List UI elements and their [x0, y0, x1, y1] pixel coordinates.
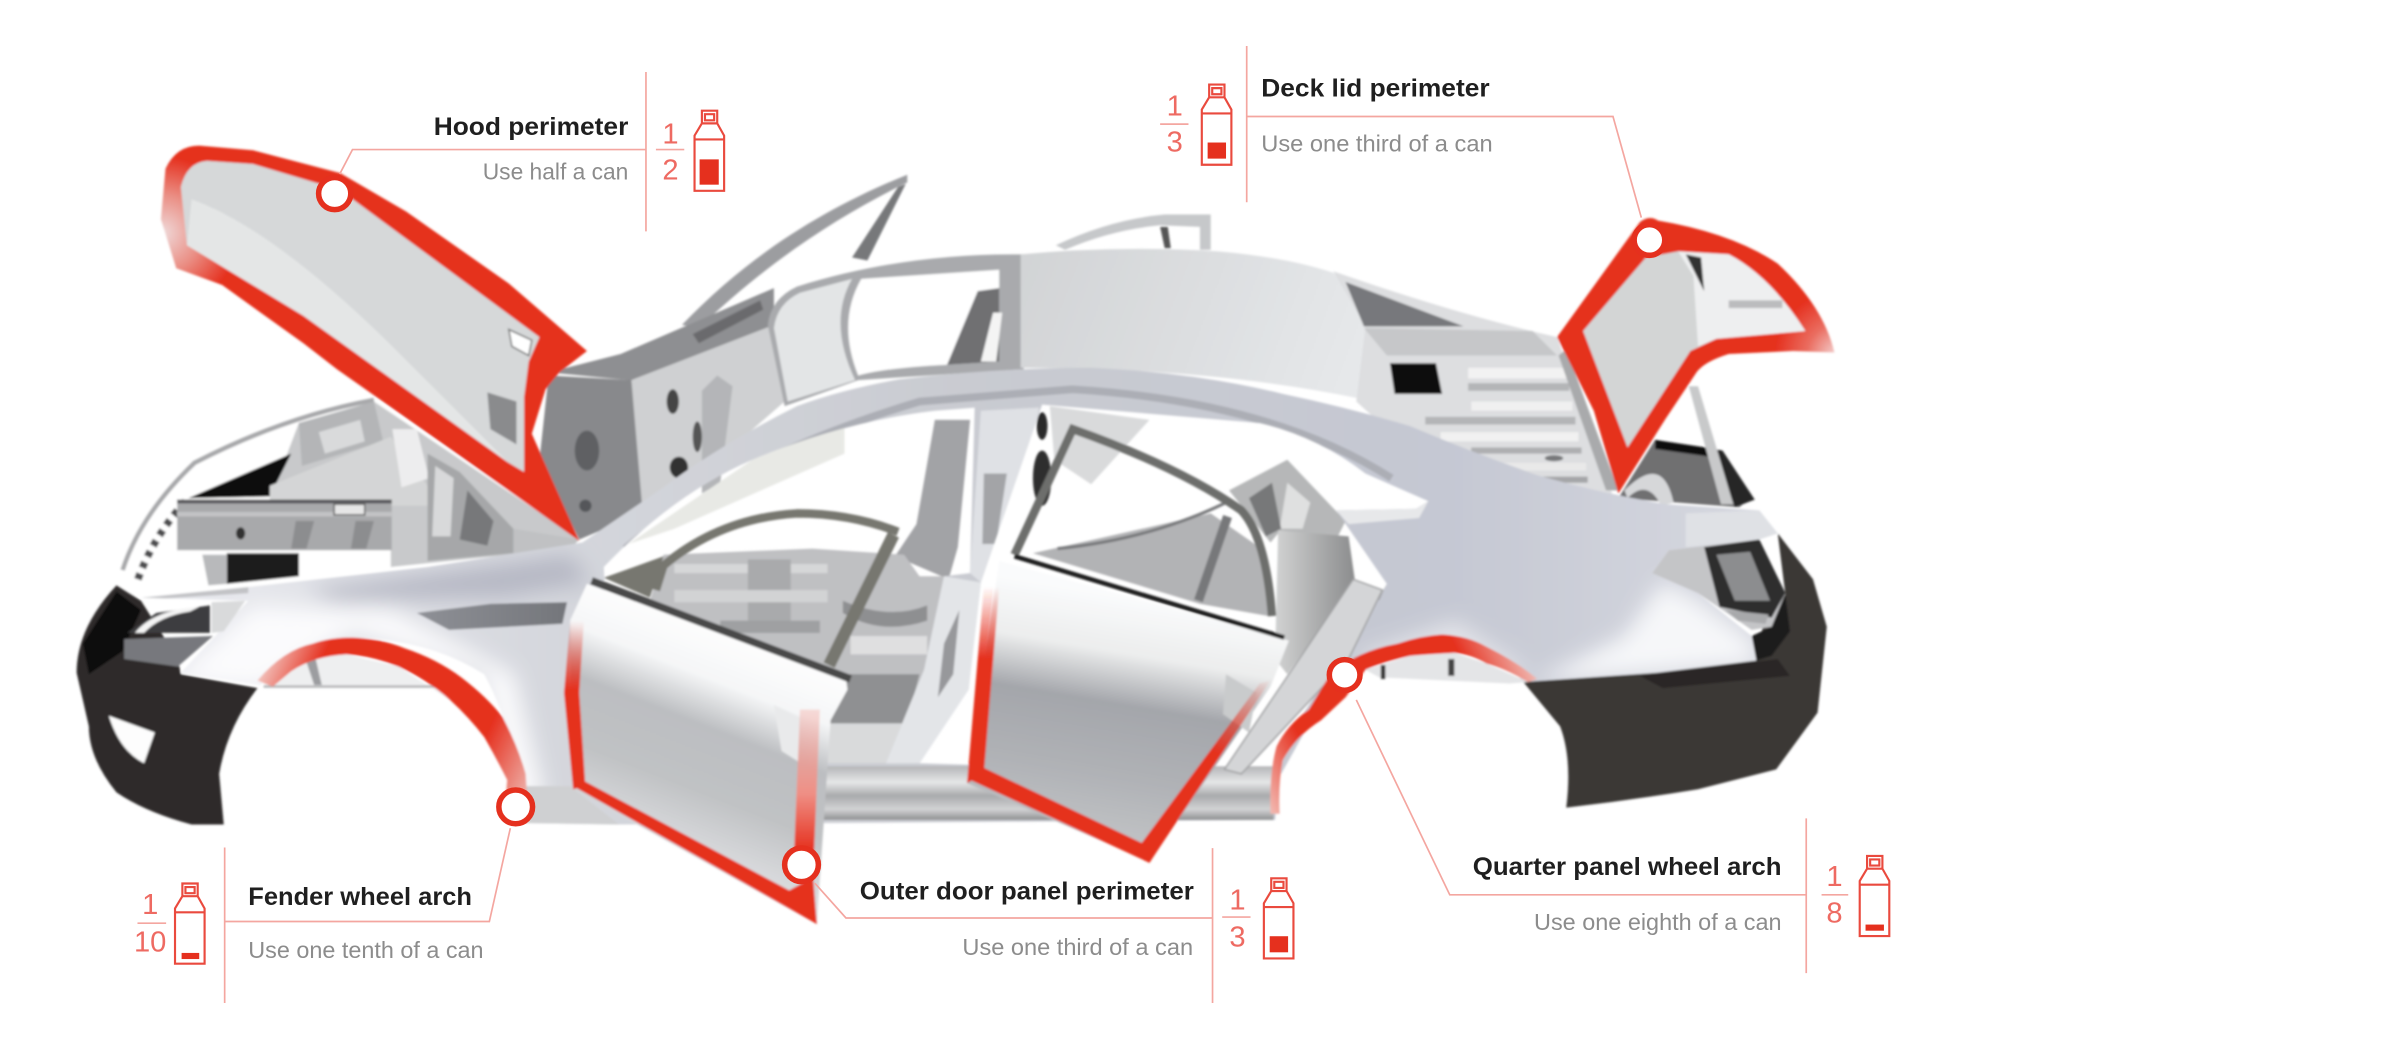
deck lid label: Deck lid perimeter	[1261, 76, 1490, 103]
fender vent crease	[417, 602, 567, 630]
door usage text: Use one third of a can	[962, 934, 1193, 960]
front wheel arch liner	[264, 654, 487, 736]
headlight	[124, 601, 245, 667]
icon: spray can third	[1264, 878, 1293, 958]
door fraction: 3	[1229, 921, 1246, 953]
fender fraction: 10	[134, 927, 166, 959]
taillight recess	[1652, 539, 1785, 630]
deck lid fraction	[1160, 91, 1188, 159]
red seam: rear door perimeter	[967, 587, 1270, 863]
strut and trunk opening	[1618, 386, 1755, 507]
quarter panel marker	[1329, 660, 1360, 690]
trunk gutter and floor	[1333, 271, 1618, 506]
deck lid marker	[1634, 225, 1665, 255]
callout: hood perimeter	[319, 72, 724, 231]
deck lid panel	[1557, 218, 1834, 493]
fender label: Fender wheel arch	[248, 884, 472, 911]
windshield header panel and far roof	[768, 249, 1366, 406]
quarter panel leader line	[1356, 700, 1806, 973]
fender fraction	[134, 889, 166, 959]
icon: spray can half	[695, 111, 724, 191]
quarter panel fraction: 1	[1826, 861, 1843, 893]
icon: spray can eighth	[1860, 856, 1889, 936]
icon: spray can third	[1202, 85, 1231, 165]
cabin interior	[628, 406, 1355, 763]
fender marker	[499, 790, 533, 824]
callout: fender wheel arch	[134, 790, 533, 1003]
deck lid usage text: Use one third of a can	[1261, 131, 1493, 157]
door marker	[785, 848, 818, 882]
far A-pillar and door jamb	[539, 288, 785, 539]
front door	[570, 513, 898, 924]
door leader line	[815, 848, 1213, 1003]
rocker sill	[524, 766, 1274, 824]
rear bumper	[1523, 533, 1827, 808]
front bumper	[77, 585, 257, 824]
fender fraction: 1	[142, 889, 158, 921]
hood panel	[161, 146, 587, 541]
car body illustration	[77, 146, 1834, 924]
red seam: fender wheel arch	[257, 638, 527, 797]
fender usage text: Use one tenth of a can	[248, 937, 484, 963]
icon: spray can tenth	[175, 884, 205, 964]
deck lid leader line	[1247, 46, 1641, 218]
callout: outer door panel perimeter	[785, 848, 1293, 1003]
hood label: Hood perimeter	[434, 114, 629, 141]
body shading	[141, 389, 1778, 812]
callout: quarter panel wheel arch	[1329, 660, 1889, 973]
red seam: quarter panel wheel arch	[1270, 634, 1537, 814]
hood fraction: 1	[662, 118, 679, 150]
hood leader line	[340, 72, 646, 231]
quarter panel usage text: Use one eighth of a can	[1534, 909, 1782, 935]
deck lid fraction: 1	[1167, 91, 1183, 123]
far side door frame	[682, 175, 1211, 328]
door fraction: 1	[1229, 885, 1246, 917]
quarter panel label: Quarter panel wheel arch	[1473, 854, 1782, 881]
engine bay	[116, 398, 579, 598]
rear door	[967, 429, 1289, 861]
fender leader line	[225, 828, 510, 1003]
quarter panel fraction: 8	[1826, 898, 1843, 930]
hood marker	[319, 177, 351, 210]
hood usage text: Use half a can	[483, 158, 628, 184]
rear door jamb strip	[1224, 579, 1382, 774]
hood fraction: 2	[662, 154, 679, 186]
main body shell	[141, 368, 1778, 824]
door fraction	[1222, 885, 1251, 953]
deck lid fraction: 3	[1167, 127, 1183, 159]
rear wheel arch liner	[1365, 653, 1528, 684]
door label: Outer door panel perimeter	[860, 879, 1194, 906]
red seam: front door perimeter	[564, 621, 820, 924]
quarter panel fraction	[1822, 861, 1848, 930]
hood fraction	[656, 118, 684, 186]
callout: deck lid perimeter	[1160, 46, 1665, 255]
